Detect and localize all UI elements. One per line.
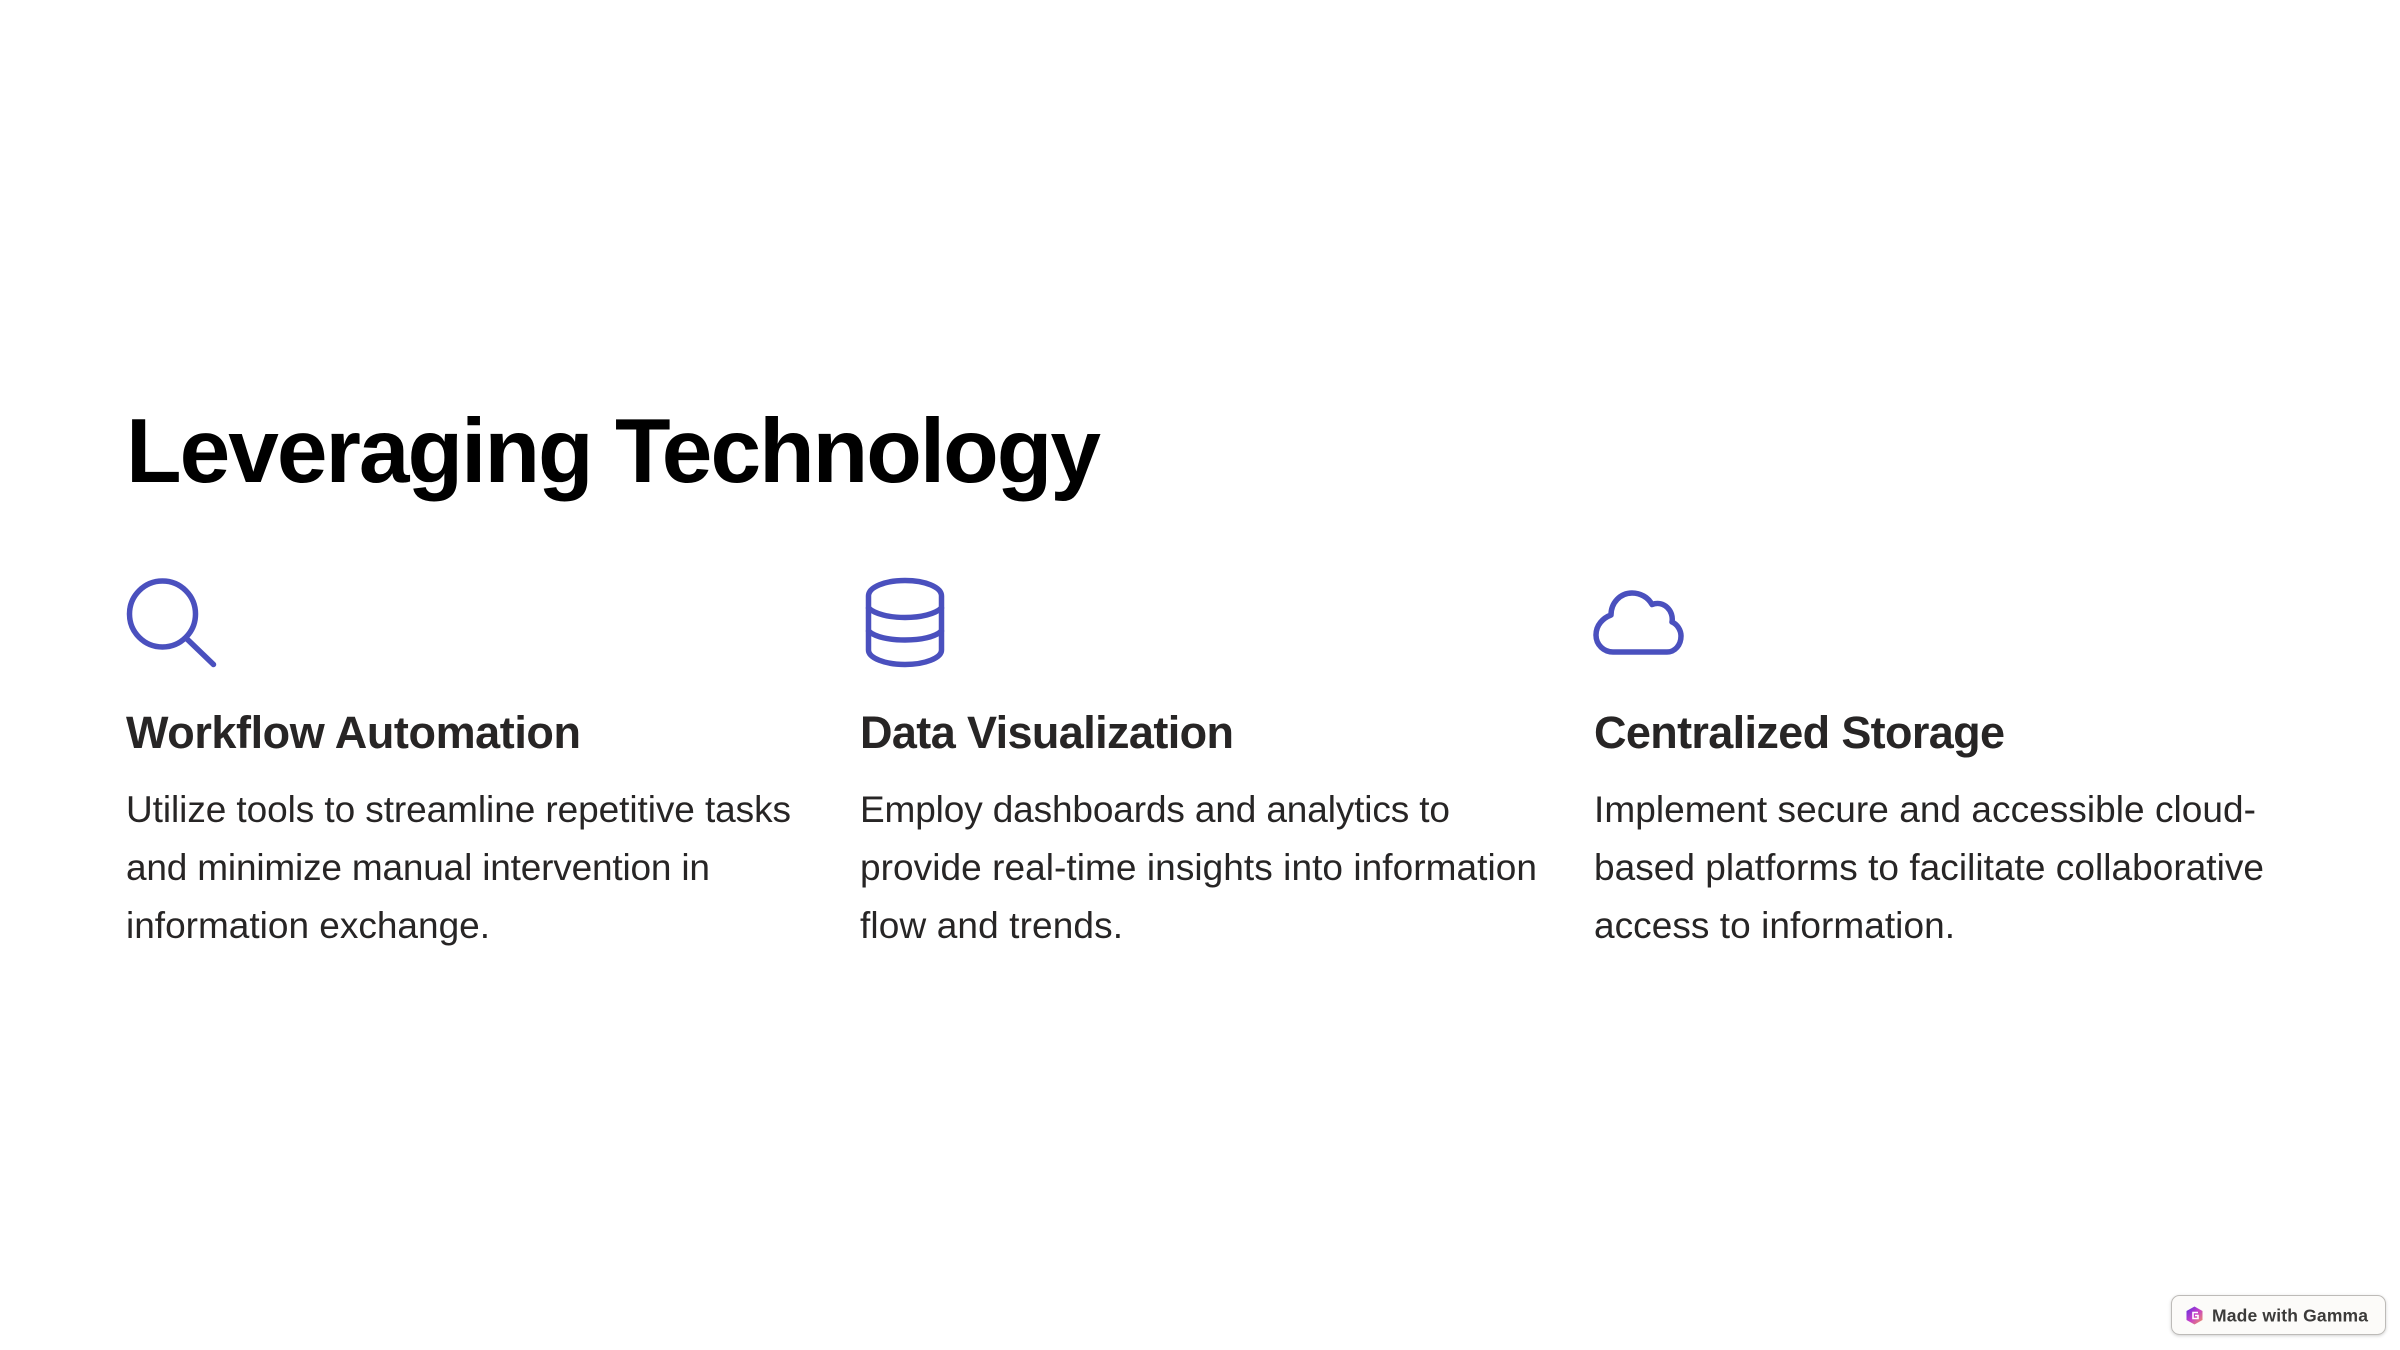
text block: data visualization: Employ dashboards and analytics to: [860, 789, 1450, 830]
text block: data visualization: flow and trends.: [860, 905, 1123, 946]
panel: workflow automation: [126, 581, 791, 946]
panel: data visualization: [860, 580, 1537, 946]
text block: data visualization: provide real-time insights into information: [860, 847, 1537, 888]
icon: magnifying glass: [130, 581, 214, 664]
heading: workflow automation: Workflow Automation: [126, 707, 581, 758]
text block: centralized storage: based platforms to facilitate collaborative: [1594, 847, 2264, 888]
text block: workflow automation: Utilize tools to streamline repetitive tasks: [126, 789, 791, 830]
badge: made with gamma: [2172, 1296, 2386, 1334]
title: Leveraging Technology: [126, 401, 1101, 502]
icon: cloud: [1596, 593, 1681, 652]
panel: centralized storage: [1594, 593, 2264, 946]
text block: workflow automation: information exchange.: [126, 905, 490, 946]
text block: data visualization: [860, 789, 1537, 946]
text block: centralized storage: [1594, 789, 2264, 946]
text block: workflow automation: [126, 789, 791, 946]
heading: centralized storage: Centralized Storage: [1594, 707, 2005, 758]
icon: gamma logo: [2186, 1306, 2202, 1324]
heading: data visualization: Data Visualization: [860, 707, 1234, 758]
badge label: Made with Gamma: [2212, 1306, 2368, 1326]
text block: centralized storage: Implement secure and accessible cloud-: [1594, 789, 2256, 830]
text block: workflow automation: and minimize manual intervention in: [126, 847, 710, 888]
icon: database: [868, 580, 942, 664]
text block: centralized storage: access to information.: [1594, 905, 1955, 946]
